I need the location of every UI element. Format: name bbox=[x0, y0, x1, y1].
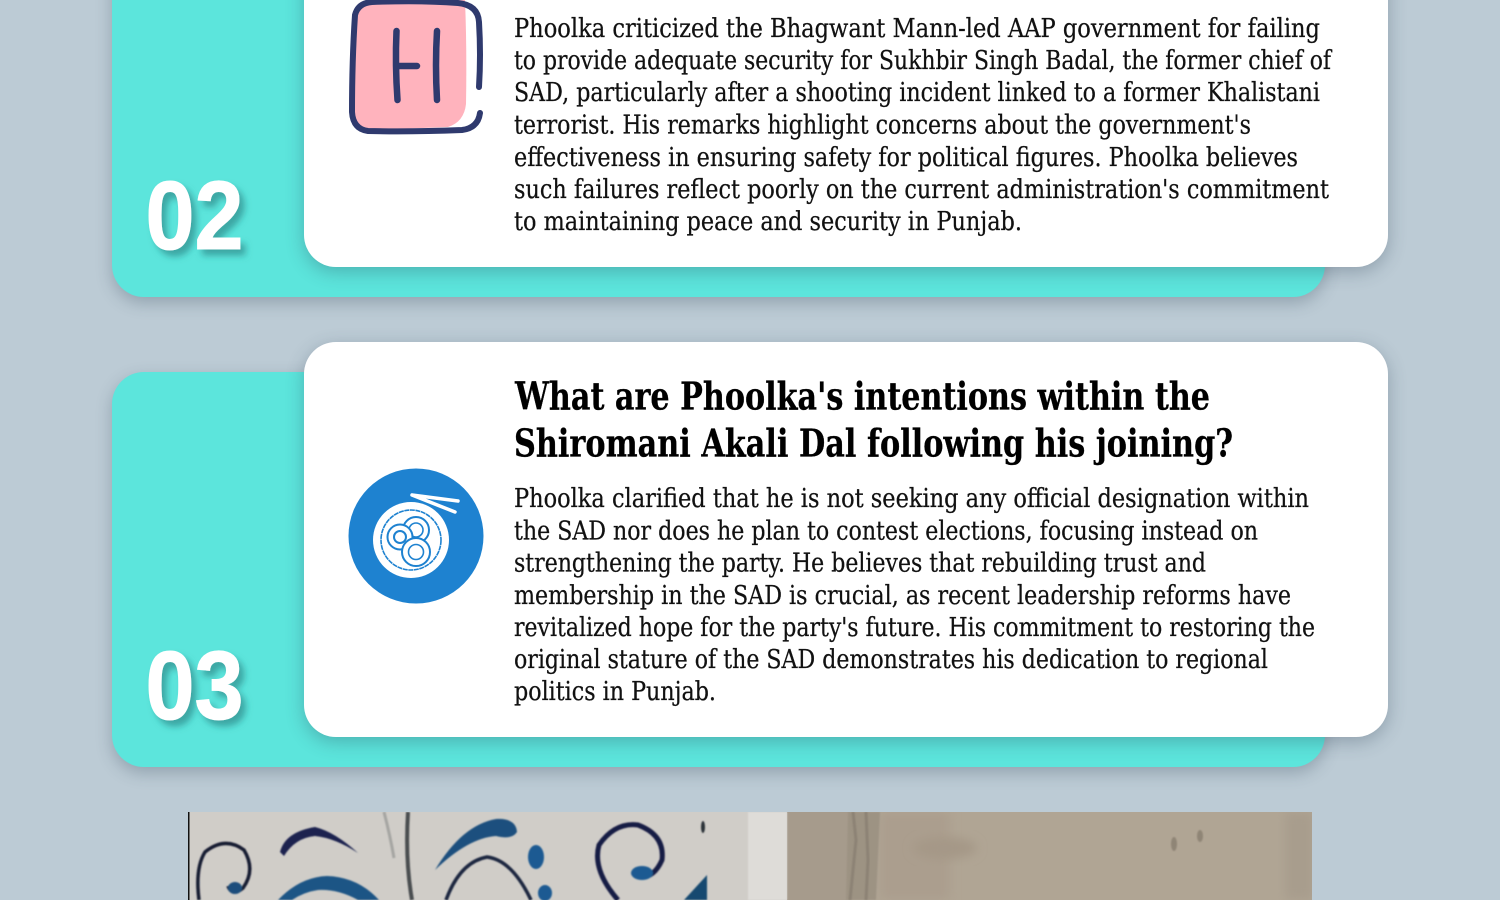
body text 03: strengthening the party. He believes that rebuilding trust and bbox=[514, 548, 1206, 578]
heading 03: Shiromani Akali Dal following his joining? bbox=[514, 420, 1233, 466]
body text 03 bbox=[514, 484, 1315, 707]
body text 02: effectiveness in ensuring safety for political figures. Phoolka believes bbox=[514, 143, 1298, 173]
icon: noodle bowl with chopsticks bbox=[348, 468, 484, 604]
body text 02: to provide adequate security for Sukhbir Singh Badal, the former chief of bbox=[514, 46, 1333, 76]
photo: painted wall with blue swirls bbox=[188, 812, 1312, 900]
white card 03 bbox=[304, 342, 1388, 737]
panel: item 03 bbox=[105, 339, 1396, 780]
heading 03: What are Phoolka's intentions within the bbox=[514, 374, 1210, 418]
body text 02: Phoolka criticized the Bhagwant Mann-led AAP government for failing bbox=[514, 14, 1320, 44]
body text 02: to maintaining peace and security in Punjab. bbox=[514, 207, 1022, 237]
body text 03: politics in Punjab. bbox=[514, 677, 716, 707]
body text 02 bbox=[514, 14, 1333, 237]
body text 03: membership in the SAD is crucial, as recent leadership reforms have bbox=[514, 581, 1291, 611]
body text 03: Phoolka clarified that he is not seeking any official designation within bbox=[514, 484, 1309, 514]
body text 03: revitalized hope for the party's future. His commitment to restoring the bbox=[514, 613, 1315, 643]
body text 02: such failures reflect poorly on the current administration's commitment bbox=[514, 175, 1329, 205]
body text 02: SAD, particularly after a shooting incident linked to a former Khalistani bbox=[514, 78, 1320, 108]
teal backing panel 02 bbox=[112, 0, 1325, 297]
icon: hand-drawn H square bbox=[352, 0, 480, 131]
teal backing panel 03 bbox=[112, 372, 1325, 767]
white card 02 bbox=[304, 0, 1388, 267]
body text 03: original stature of the SAD demonstrates his dedication to regional bbox=[514, 645, 1268, 675]
heading 03 bbox=[514, 374, 1233, 466]
body text 03: the SAD nor does he plan to contest elections, focusing instead on bbox=[514, 516, 1258, 546]
body text 02: terrorist. His remarks highlight concerns about the government's bbox=[514, 110, 1251, 140]
number 02: 02 bbox=[146, 161, 244, 270]
number 03: 03 bbox=[146, 631, 244, 740]
panel: item 02 bbox=[105, 0, 1396, 310]
